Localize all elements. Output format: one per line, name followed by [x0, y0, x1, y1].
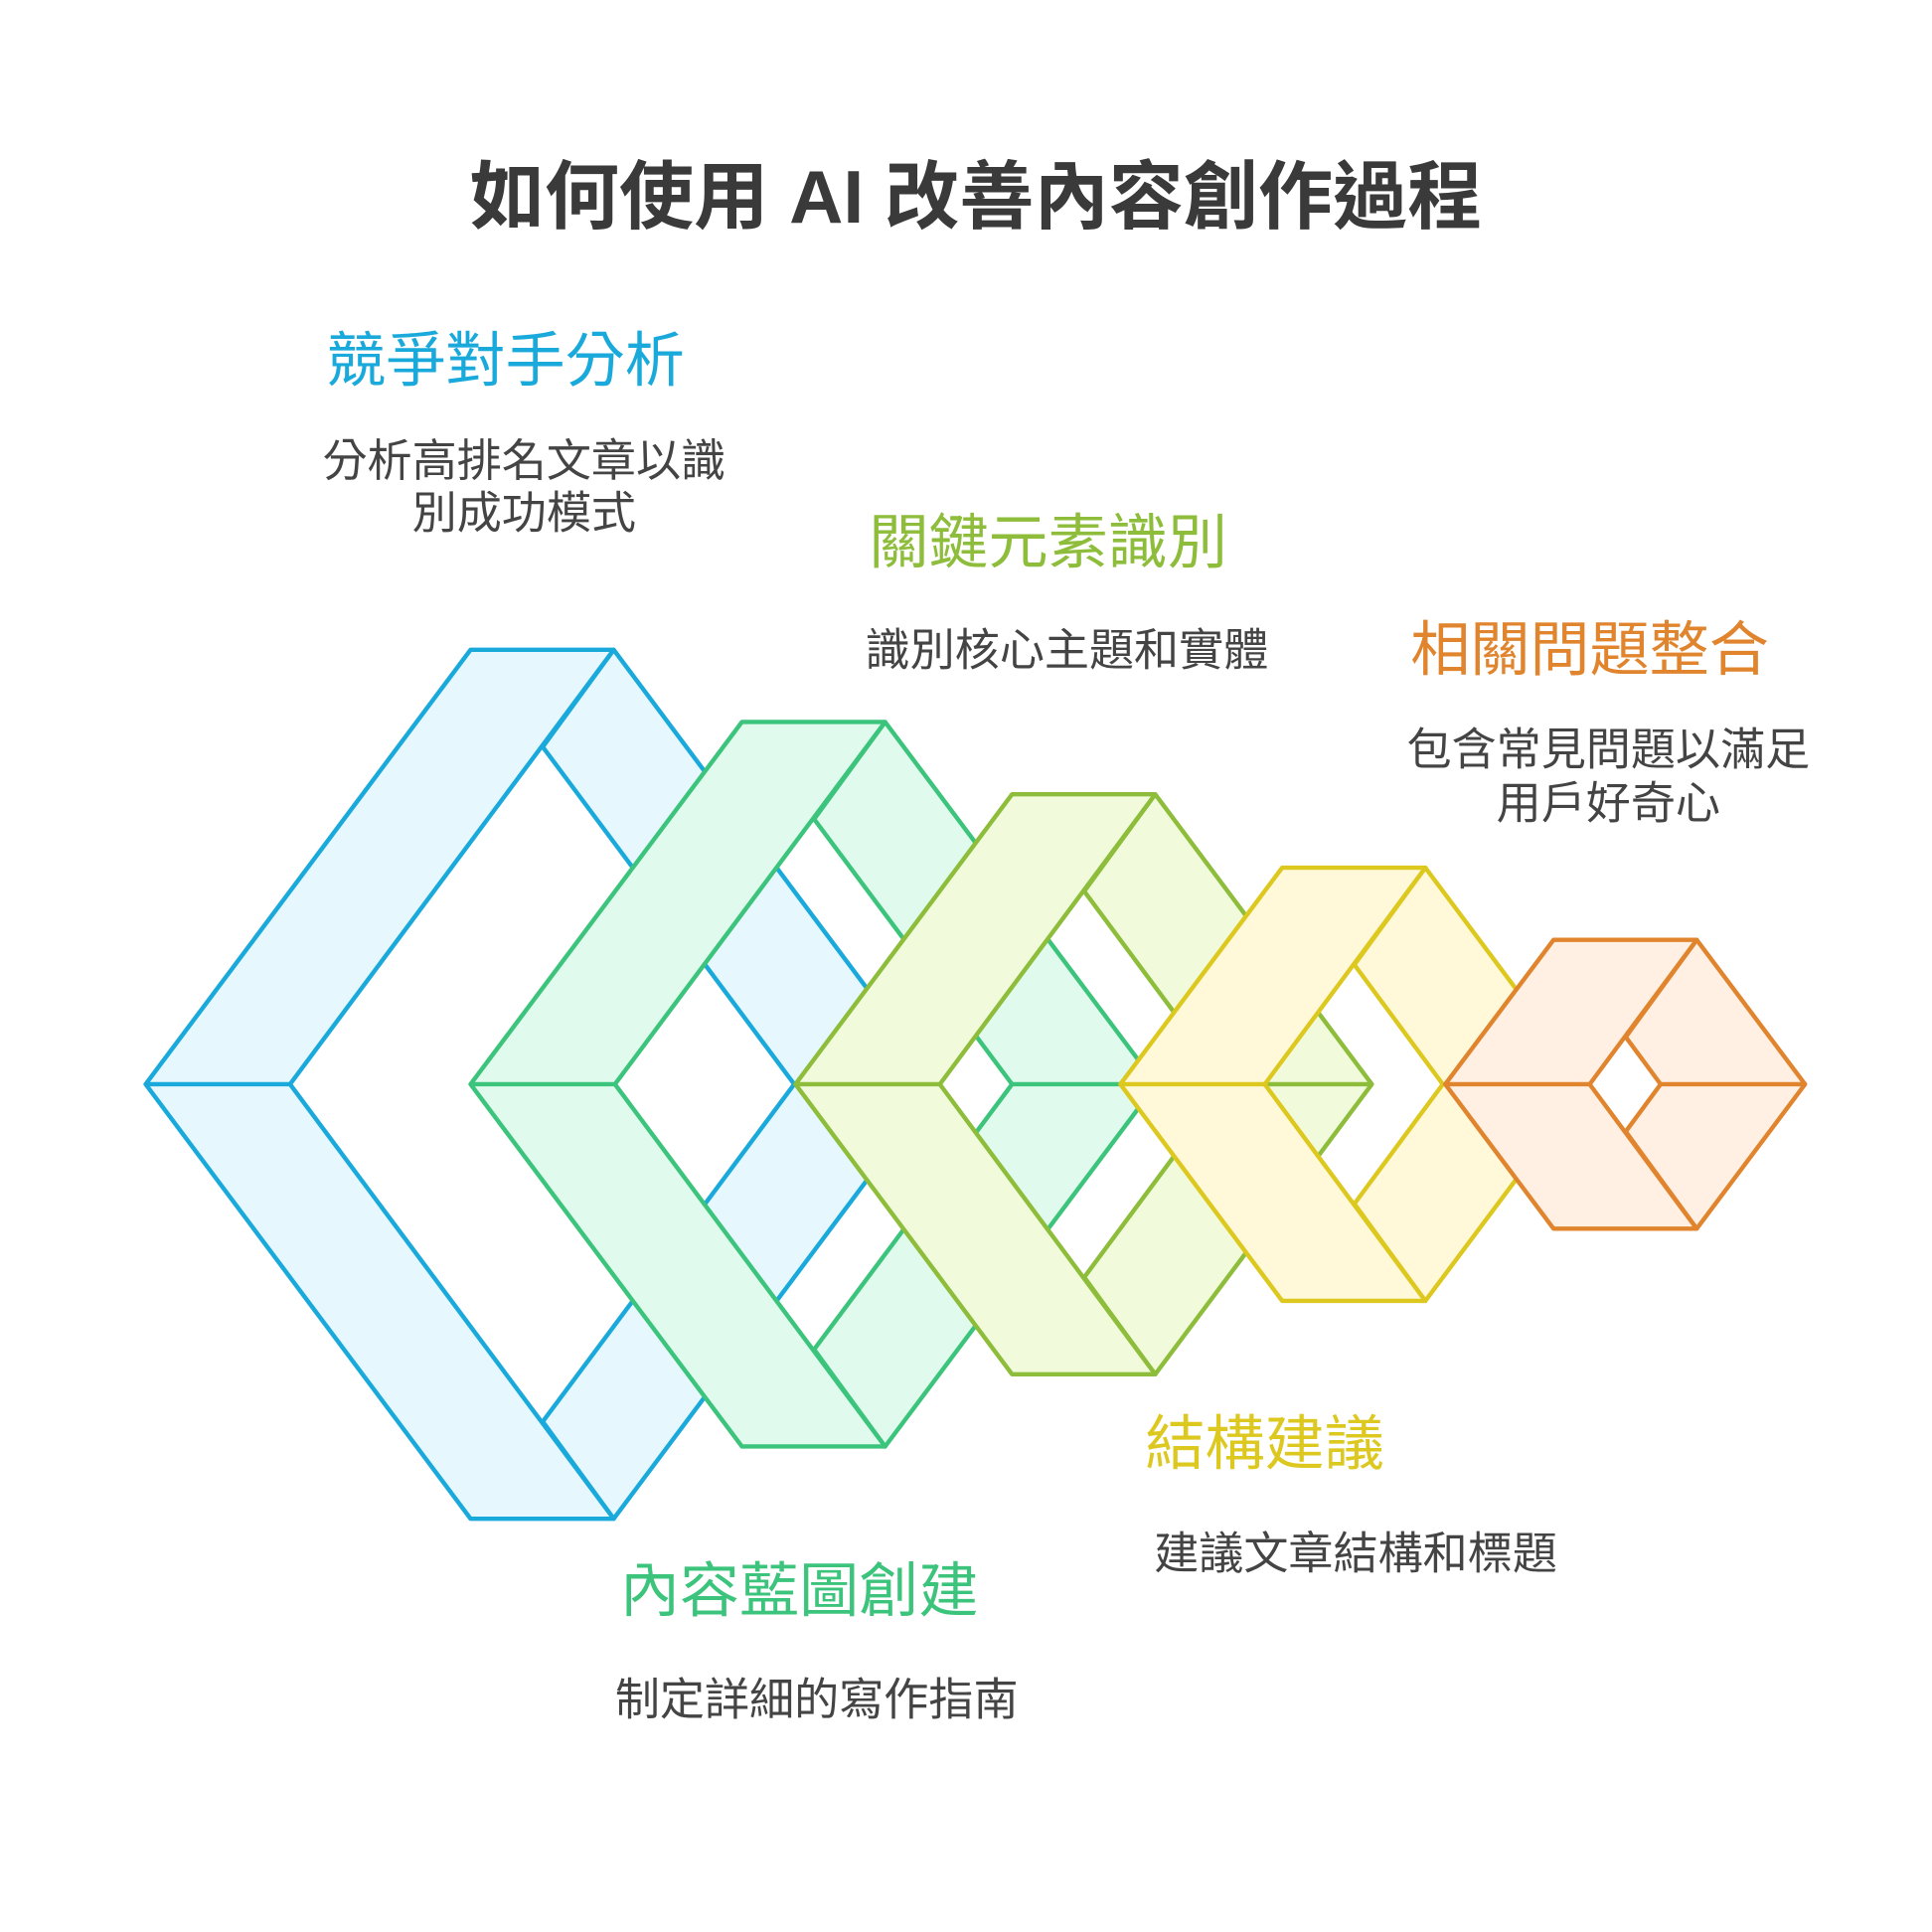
ring back: blue — [543, 650, 938, 1519]
section: 結構建議 — [1145, 1410, 1557, 1579]
ring back: yellow — [1355, 868, 1587, 1301]
section: 內容藍圖創建: 制定詳細的寫作指南 — [615, 1674, 1019, 1724]
section: 關鍵元素識別: 關鍵元素識別 — [869, 510, 1227, 576]
section: 競爭對手分析 — [322, 328, 725, 539]
section: 關鍵元素識別: 識別核心主題和實體 — [866, 624, 1268, 675]
ring front: orange — [1445, 940, 1696, 1228]
section: 相關問題整合: 相關問題整合 — [1410, 616, 1769, 683]
section: 相關問題整合: 包含常見問題以滿足 — [1406, 724, 1810, 775]
ring back: lime — [1084, 794, 1371, 1374]
ring back: orange — [1626, 940, 1805, 1228]
title: 如何使用 AI 改善內容創作過程 — [470, 155, 1482, 239]
section: 競爭對手分析: 競爭對手分析 — [326, 328, 685, 395]
section: 內容藍圖創建 — [615, 1557, 1019, 1724]
section: 競爭對手分析: 分析高排名文章以識 — [322, 435, 725, 486]
section: 相關問題整合 — [1406, 616, 1810, 828]
section: 內容藍圖創建: 內容藍圖創建 — [620, 1557, 978, 1624]
chain diagram — [146, 650, 1805, 1519]
section: 競爭對手分析: 別成功模式 — [412, 488, 636, 539]
ring back: green — [814, 722, 1157, 1446]
ring front: blue — [146, 650, 614, 1519]
section: 相關問題整合: 用戶好奇心 — [1497, 777, 1720, 828]
ring front: yellow — [1120, 868, 1425, 1301]
section: 關鍵元素識別 — [866, 510, 1268, 675]
ring front: green — [470, 722, 886, 1446]
section: 結構建議: 結構建議 — [1145, 1410, 1384, 1477]
section: 結構建議: 建議文章結構和標題 — [1154, 1529, 1557, 1579]
ring front: lime — [795, 794, 1155, 1374]
